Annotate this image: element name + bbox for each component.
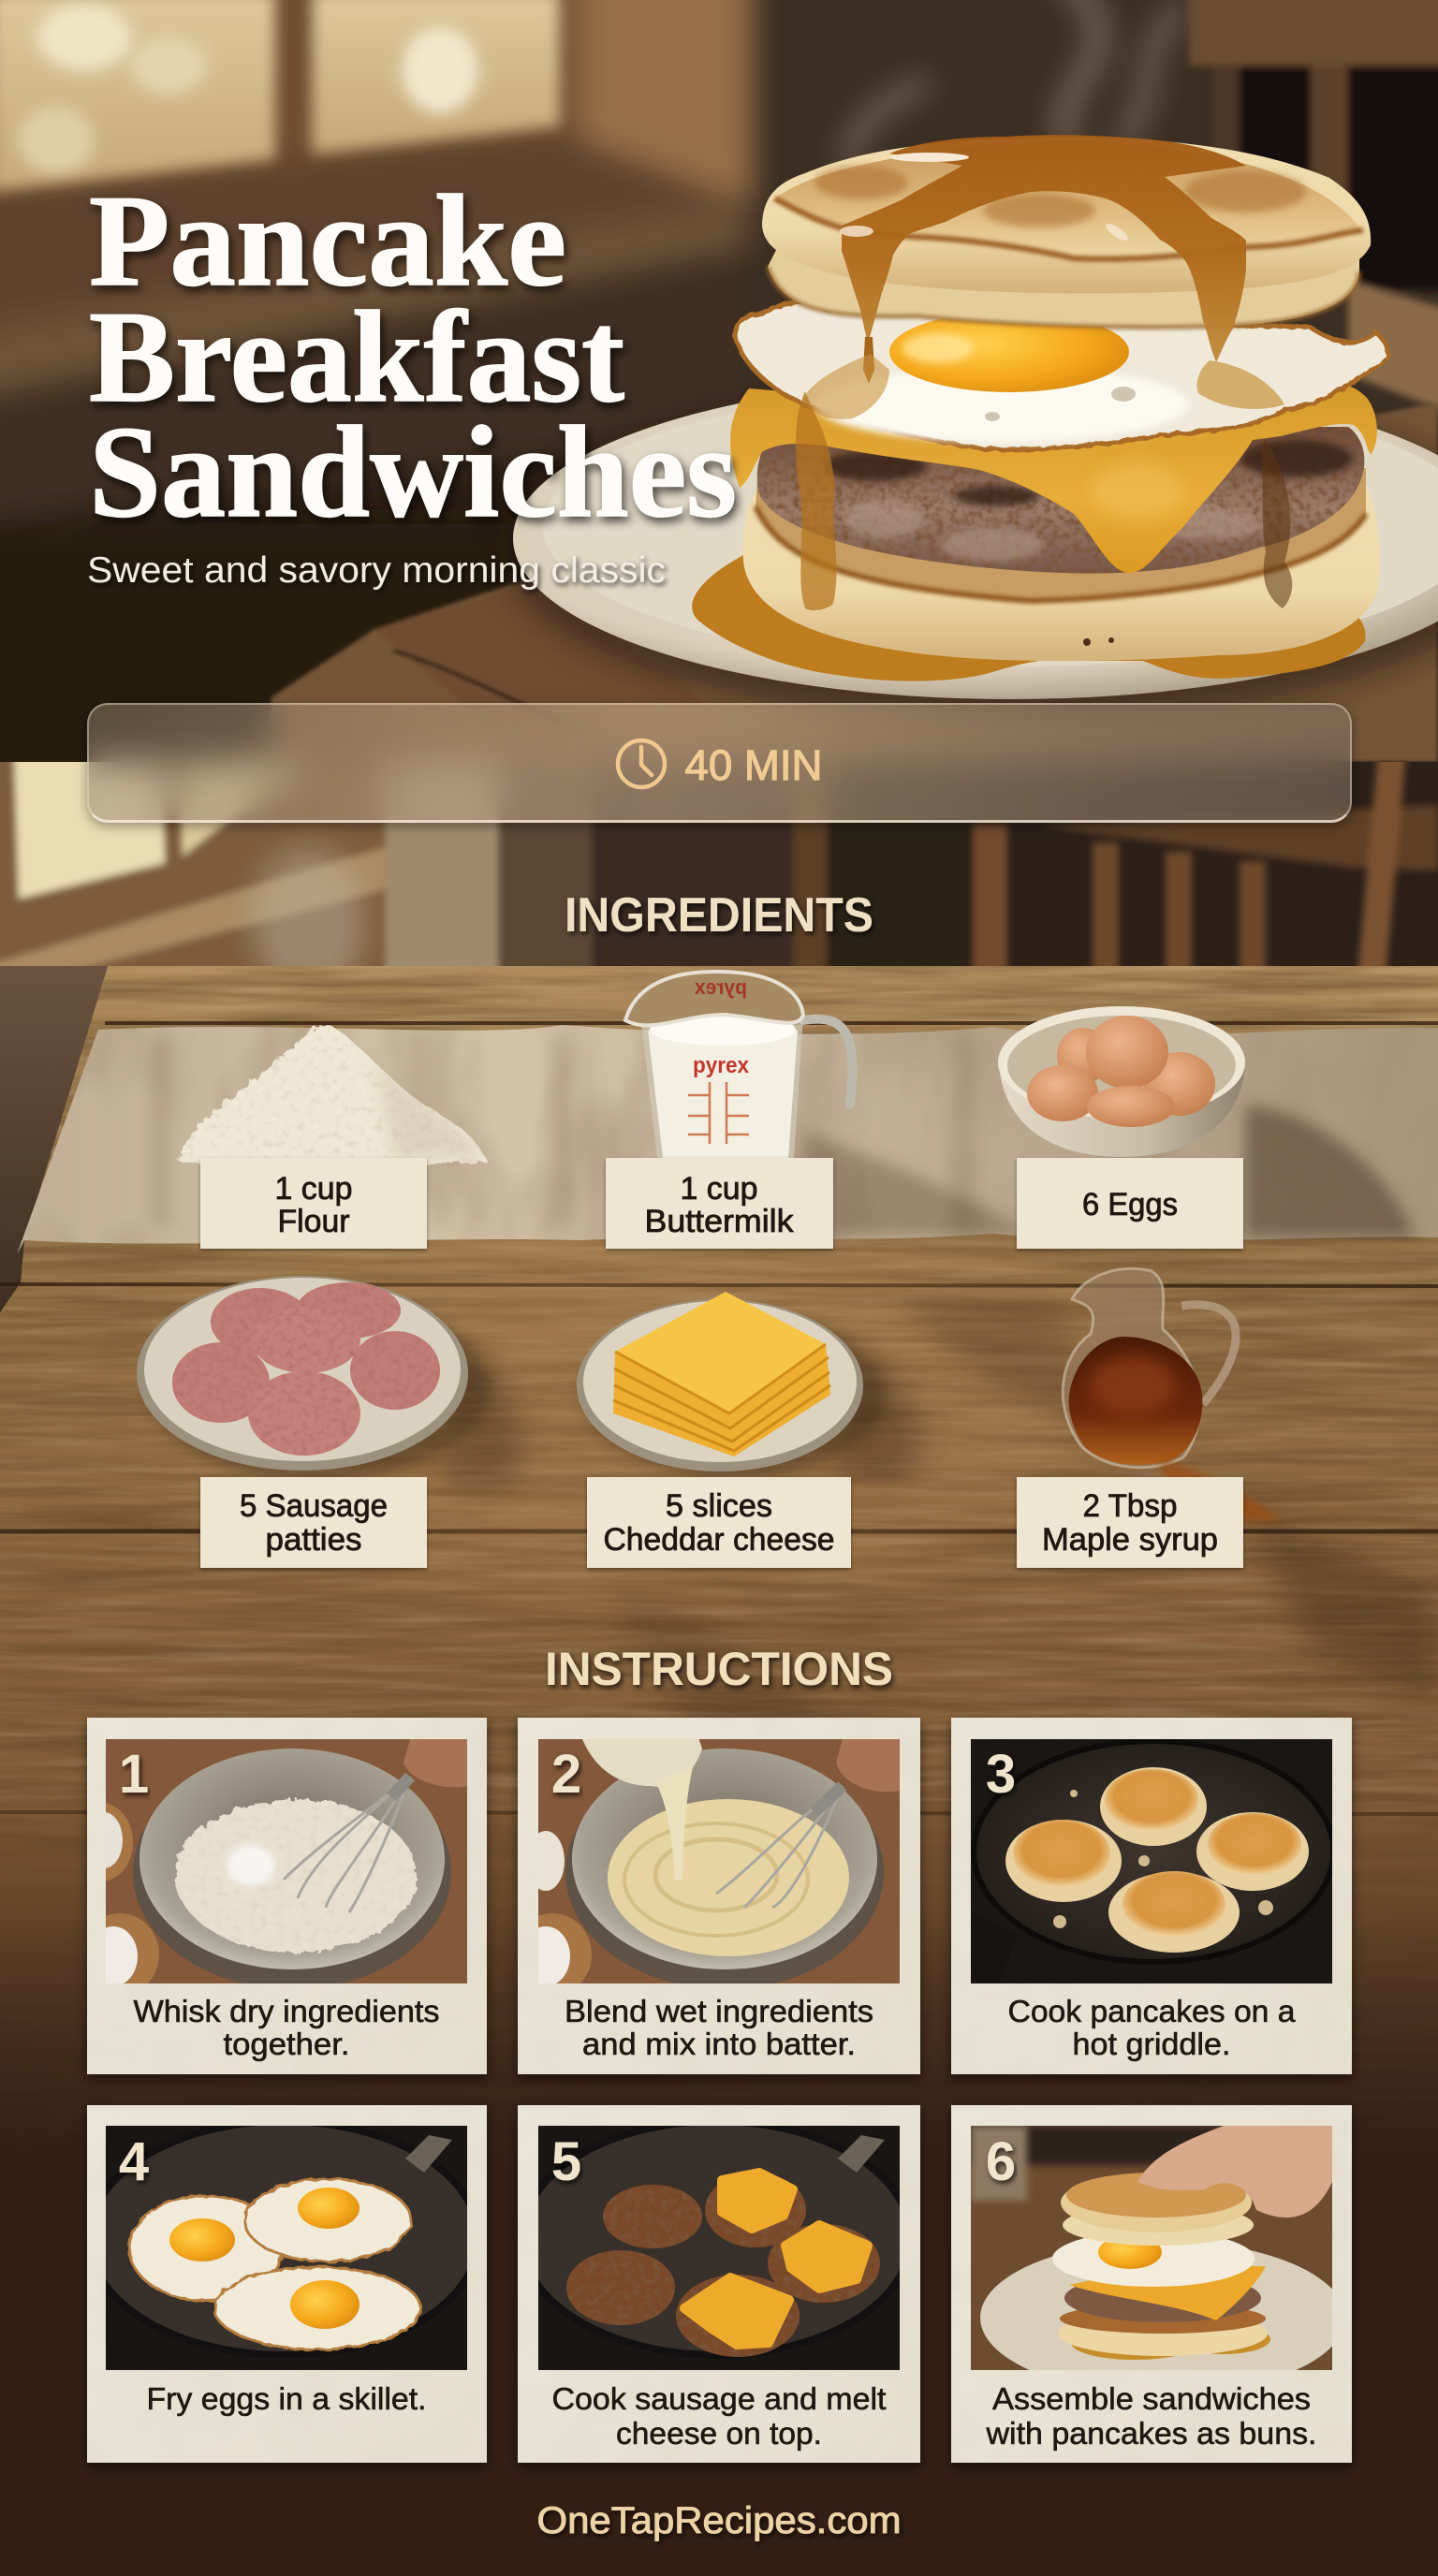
ingredient tag: sausage: [200, 1477, 427, 1568]
footer website: OneTapRecipes.com: [537, 2500, 901, 2541]
step caption 2: and mix into batter.: [582, 2027, 856, 2061]
photo: sausage and cheese in skillet: [521, 2121, 911, 2370]
ingredients heading: INGREDIENTS: [565, 888, 873, 943]
icon: flour pile: [178, 1024, 487, 1166]
step caption 5: [552, 2381, 886, 2451]
ingredient tag: flour: Flour: [277, 1204, 350, 1239]
ingredient tag: buttermilk: [606, 1158, 833, 1249]
syrup drips: [796, 337, 1292, 610]
ingredient tag: flour: [200, 1158, 427, 1249]
title: Pancake: [89, 168, 566, 314]
syrup pool: [692, 552, 1366, 681]
step caption 3: Cook pancakes on a: [1007, 1994, 1296, 2028]
cook time: 40 MIN: [685, 741, 822, 789]
wall post: [386, 753, 498, 977]
step caption 5: Cook sausage and melt: [552, 2381, 886, 2416]
step caption 2: Blend wet ingredients: [565, 1994, 873, 2028]
step number 3: 3: [986, 1744, 1016, 1805]
icon: plate of sausage patties: [137, 1276, 489, 1481]
step number 4: 4: [119, 2131, 149, 2192]
ingredient tag: cheddar: 5 slices: [666, 1488, 772, 1524]
ingredient tag: sausage: patties: [266, 1522, 361, 1558]
icon: maple syrup jug: [1063, 1268, 1283, 1521]
step caption 6: with pancakes as buns.: [985, 2416, 1316, 2451]
step card 2: [513, 1718, 920, 2074]
title: Sandwiches: [89, 400, 737, 545]
fried egg: [735, 302, 1388, 449]
ingredient tag: syrup: 2 Tbsp: [1082, 1488, 1178, 1524]
melted cheese: [730, 386, 1377, 573]
step card 6: [951, 2105, 1352, 2463]
photo: blending batter: [513, 1734, 900, 1996]
icon: stacked pancake sandwich: [692, 135, 1388, 681]
ingredient tag: syrup: [1017, 1477, 1243, 1568]
sausage patty: [757, 427, 1364, 574]
ingredient tag: cheddar: Cheddar cheese: [603, 1522, 835, 1558]
ingredient tag: cheddar: [587, 1477, 851, 1568]
steam: [847, 0, 1180, 159]
step caption 3: [1007, 1994, 1296, 2061]
wooden table corner: [267, 402, 1438, 762]
subtitle: Sweet and savory morning classic: [87, 550, 666, 591]
step caption 6: Assemble sandwiches: [992, 2381, 1311, 2416]
step caption 1: Whisk dry ingredients: [133, 1994, 440, 2028]
icon: measuring cup of buttermilk: pyrex: [694, 975, 747, 999]
egg yolk: [889, 312, 1129, 392]
bottom pancake: [743, 468, 1380, 661]
instructions heading: INSTRUCTIONS: [545, 1643, 893, 1695]
window: [0, 753, 386, 977]
window and wall backdrop: [0, 0, 1438, 786]
step caption 5: cheese on top.: [616, 2416, 822, 2451]
step caption 1: [133, 1994, 440, 2061]
step caption 6: [985, 2381, 1316, 2451]
syrup on top: [842, 135, 1246, 362]
ingredient tag: buttermilk: Buttermilk: [644, 1204, 795, 1239]
photo: griddle with pancakes: [971, 1739, 1333, 1983]
step caption 4: Fry eggs in a skillet.: [146, 2381, 427, 2416]
title: [89, 168, 737, 545]
icon: measuring cup of buttermilk: pyrex: [693, 1053, 750, 1078]
second scene: back of the room: [0, 753, 1438, 997]
linen cloth: [17, 1025, 1438, 1254]
icon: bowl of eggs: [998, 1006, 1245, 1157]
icon: clock: [618, 740, 665, 787]
ingredient tag: buttermilk: 1 cup: [680, 1171, 758, 1207]
ingredient tag: sausage: 5 Sausage: [240, 1488, 388, 1524]
photo: whisking dry ingredients: [69, 1739, 467, 1996]
icon: plate of cheddar slices: [577, 1292, 885, 1477]
warm light wash and shadows: [150, 1179, 1123, 1591]
ingredient tag: flour: 1 cup: [275, 1171, 352, 1207]
plank seams: [0, 1023, 1438, 1814]
step caption 3: hot griddle.: [1073, 2027, 1230, 2061]
plate: [506, 377, 1438, 721]
step card 4: [87, 2105, 487, 2463]
photo: frying eggs: [89, 2121, 478, 2370]
top pancake: [762, 137, 1371, 328]
step caption 1: together.: [223, 2027, 350, 2061]
ingredients table: [0, 966, 1438, 2176]
chair at top right: [1189, 0, 1438, 412]
hero photo: [0, 0, 1438, 786]
step card 1: [69, 1718, 487, 2074]
ingredient tag: syrup: Maple syrup: [1042, 1522, 1218, 1558]
photo: assembled sandwich: [971, 2126, 1345, 2394]
step number 6: 6: [986, 2131, 1016, 2192]
step card 3: [951, 1718, 1352, 2074]
time bar: [87, 703, 1352, 823]
steam plume: [253, 847, 365, 997]
step card 5: [518, 2105, 920, 2463]
ingredient tag: eggs: [1017, 1158, 1243, 1249]
ingredient tag: eggs: 6 Eggs: [1082, 1187, 1178, 1222]
step caption 2: [565, 1994, 873, 2061]
step number 1: 1: [119, 1744, 149, 1805]
step number 2: 2: [551, 1744, 581, 1805]
chair: [974, 824, 1007, 977]
step number 5: 5: [551, 2131, 581, 2192]
icon: measuring cup of buttermilk: [625, 972, 852, 1158]
title: Breakfast: [89, 285, 624, 430]
